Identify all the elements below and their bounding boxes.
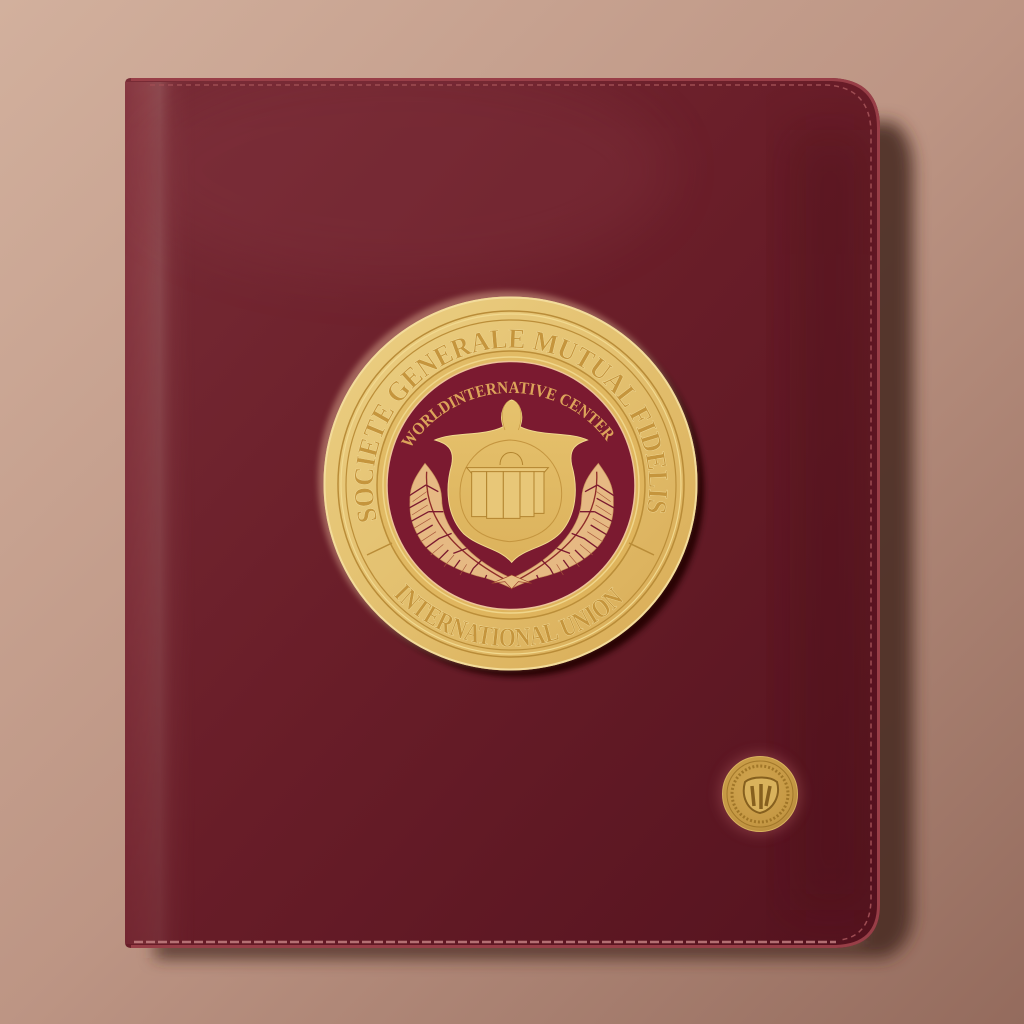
- seal bottom inscription: INTERNATIONAL UNION: [393, 583, 623, 647]
- bottom ribbon divider lines: [367, 543, 654, 555]
- panel: burgundy leather folder: [125, 60, 880, 948]
- centre inscription: WORLDINTERNATIVE CENTER: [400, 382, 614, 446]
- spine highlight: [125, 82, 172, 944]
- small seal glow: [719, 753, 801, 835]
- edge rim: [131, 80, 878, 946]
- lower stitch highlight: [134, 941, 836, 943]
- icon: large gold seal: [315, 288, 708, 680]
- small seal emblem: [744, 778, 778, 813]
- shield: [435, 400, 587, 562]
- burgundy centre field: [387, 362, 635, 610]
- wreath knot: [492, 575, 532, 589]
- laurel wreath left: [407, 463, 512, 588]
- small seal disc: [722, 756, 798, 832]
- laurel wreath right: [512, 463, 616, 588]
- seal top inscription: SOCIETE GENERALE MUTUAL FIDELIS: [354, 329, 668, 522]
- seal cast shadow: [330, 303, 704, 677]
- soft sheen and right shading: [324, 145, 860, 832]
- folder drop shadow: [155, 122, 913, 958]
- seal gold disc: [324, 296, 698, 670]
- shield columns: [467, 452, 548, 518]
- seal pale halo: [318, 291, 696, 669]
- icon: small gold seal: [719, 753, 801, 835]
- stitching: [150, 85, 871, 940]
- emblem drawn in zoom coordinates: [407, 400, 616, 589]
